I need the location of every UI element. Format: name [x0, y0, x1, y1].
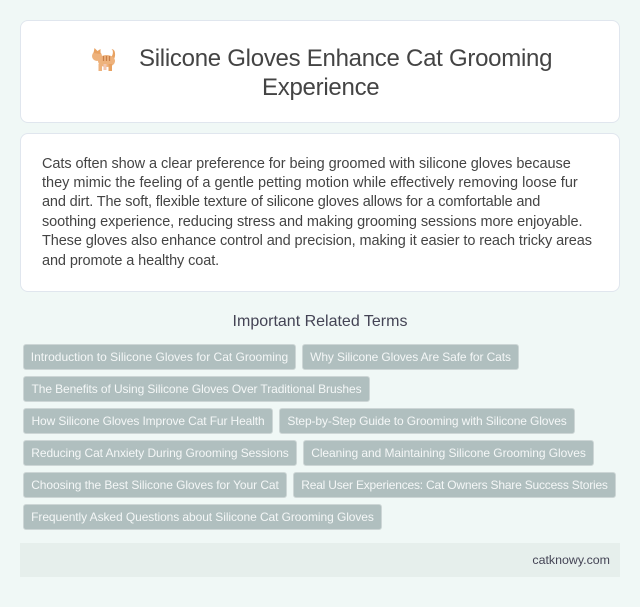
title: Experience — [262, 74, 379, 101]
footer text: catknowy.com — [532, 553, 610, 567]
tag: Reducing Cat Anxiety During Grooming Sessions — [31, 446, 289, 460]
tag — [293, 472, 616, 498]
tag: How Silicone Gloves Improve Cat Fur Health — [31, 414, 265, 428]
icon: cat — [92, 48, 116, 71]
tag — [23, 376, 370, 402]
tag — [279, 408, 575, 434]
tag: Why Silicone Gloves Are Safe for Cats — [310, 350, 511, 364]
title: Silicone Gloves Enhance Cat Grooming — [139, 45, 552, 72]
tag: Choosing the Best Silicone Gloves for Your Cat — [31, 478, 279, 492]
summary text: soothing experience, reducing stress and making grooming sessions more enjoyable. — [42, 214, 582, 230]
footer bar — [20, 543, 620, 577]
tag — [23, 472, 287, 498]
related terms tags — [23, 344, 616, 530]
tag — [23, 344, 296, 370]
summary text: they mimic the feeling of a gentle petting motion while effectively removing loose fur — [42, 175, 578, 191]
summary text: Cats often show a clear preference for being groomed with silicone gloves because — [42, 156, 571, 172]
related terms heading: Important Related Terms — [233, 313, 407, 330]
tag — [23, 504, 382, 530]
tag: Cleaning and Maintaining Silicone Grooming Gloves — [311, 446, 586, 460]
tag — [23, 440, 297, 466]
tag — [302, 344, 519, 370]
tag — [23, 408, 273, 434]
tag: The Benefits of Using Silicone Gloves Over Traditional Brushes — [32, 382, 361, 396]
tag: Introduction to Silicone Gloves for Cat Grooming — [31, 350, 288, 364]
tag — [303, 440, 594, 466]
summary text: and dirt. The soft, flexible texture of silicone gloves allows for a comfortable and — [42, 194, 540, 210]
title — [139, 45, 552, 101]
tag: Real User Experiences: Cat Owners Share Success Stories — [301, 478, 608, 492]
summary panel — [20, 133, 620, 292]
summary text: These gloves also enhance control and precision, making it easier to reach tricky areas — [42, 233, 592, 249]
tag: Frequently Asked Questions about Silicone Cat Grooming Gloves — [31, 510, 374, 524]
header panel — [20, 20, 620, 123]
summary text: and promote a healthy coat. — [42, 253, 219, 269]
tag: Step-by-Step Guide to Grooming with Silicone Gloves — [287, 414, 567, 428]
summary text — [42, 156, 592, 269]
